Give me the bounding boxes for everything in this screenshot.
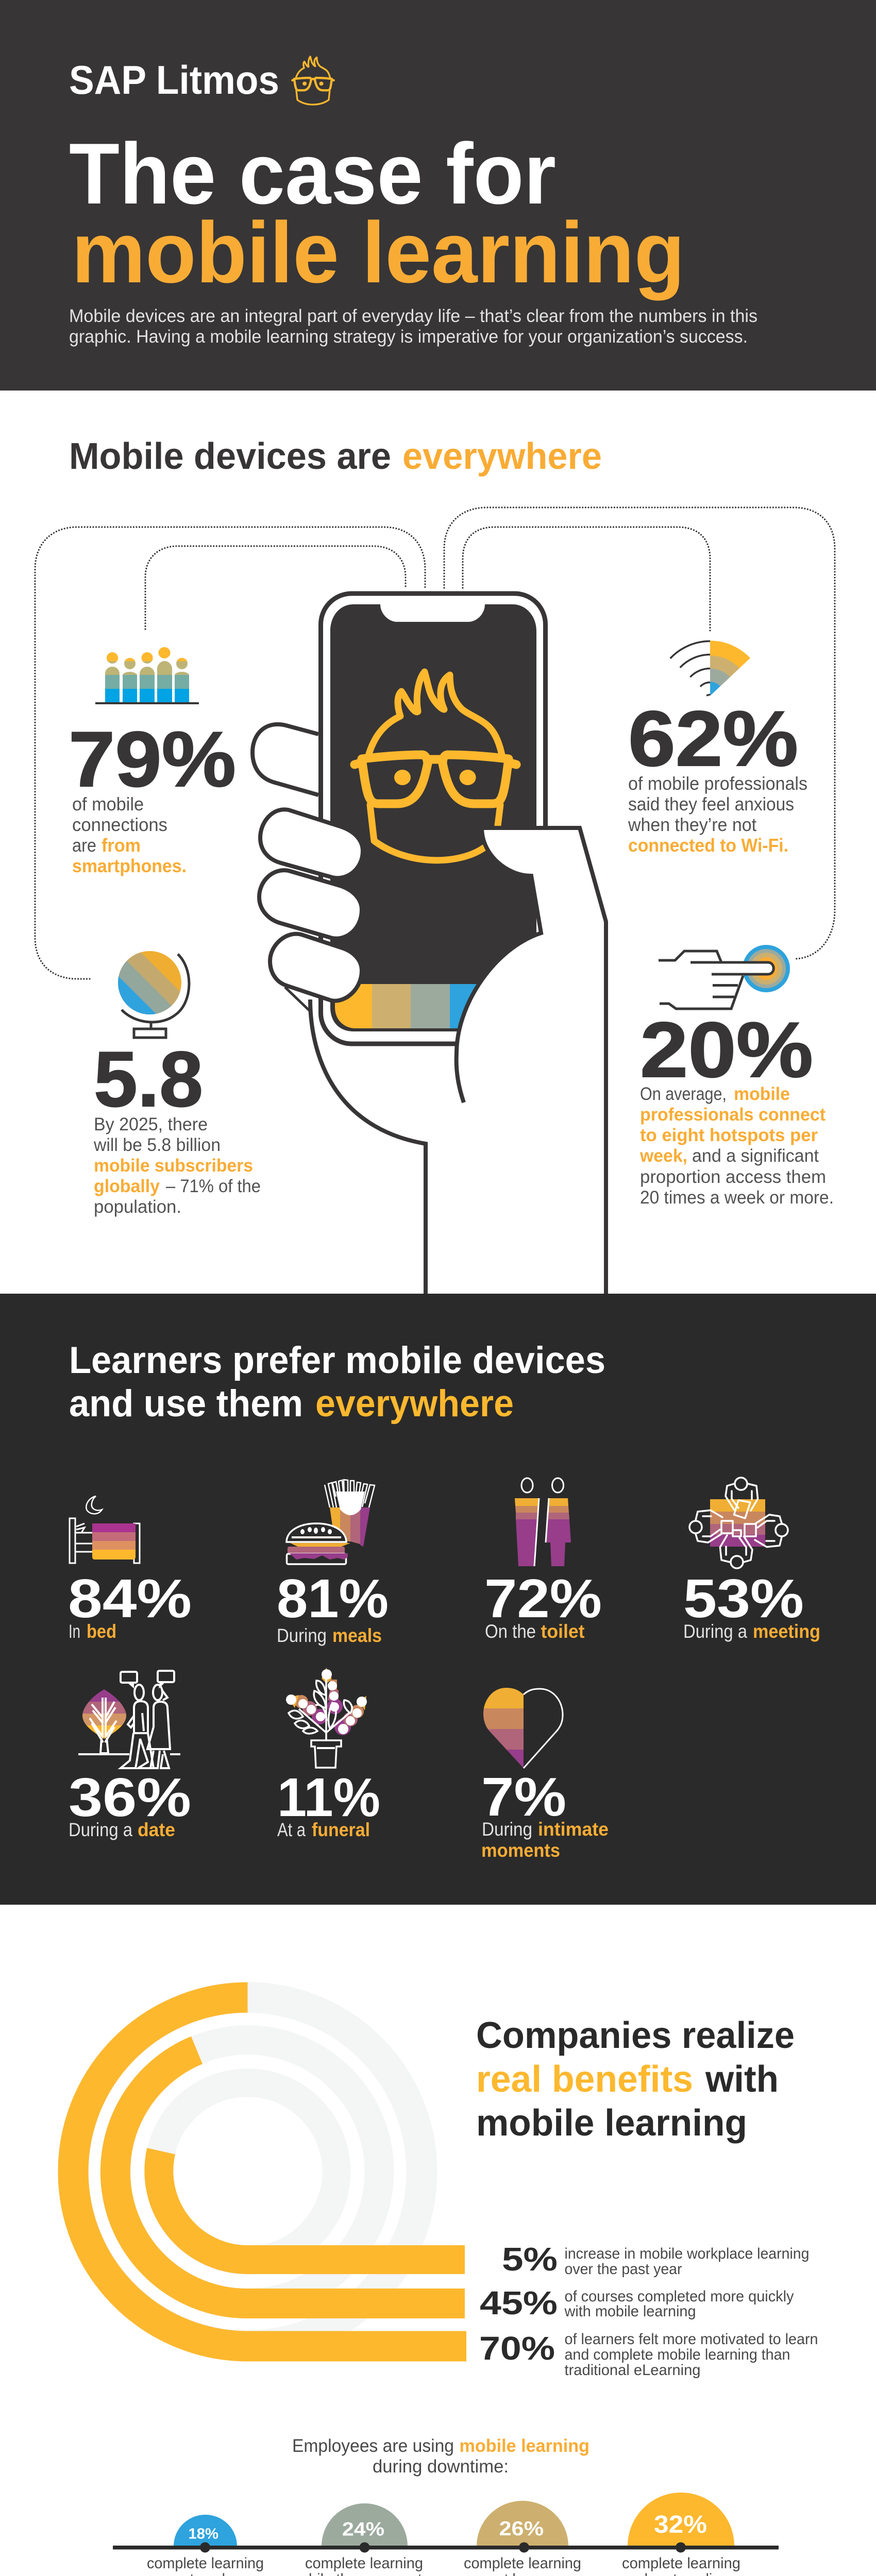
stat: during intimate moments	[479, 1685, 609, 1861]
label: On the	[485, 1621, 536, 1642]
number: 36%	[69, 1767, 191, 1828]
stat: 70%: and complete mobile learning than	[565, 2346, 790, 2363]
icon: couple walking by tree	[78, 1671, 180, 1768]
heading: companies realize real benefits	[476, 2015, 795, 2144]
description: to eight hotspots per	[640, 1125, 818, 1145]
stat: 5%: over the past year	[565, 2261, 682, 2278]
icon: mascot face on screen	[355, 672, 516, 860]
label: moments	[481, 1840, 560, 1861]
description: smartphones.	[72, 855, 187, 876]
panel: learners prefer mobile devices	[0, 1294, 876, 1905]
number: 7%	[481, 1767, 566, 1827]
phone screen	[330, 604, 536, 1031]
label: funeral	[312, 1819, 370, 1840]
description	[72, 793, 187, 876]
dome: 26% home: 26%	[499, 2518, 544, 2540]
stat: 70%	[479, 2330, 818, 2379]
label: when traveling: complete learning	[622, 2555, 740, 2572]
number: 72%	[484, 1568, 602, 1629]
description: of mobile	[72, 793, 144, 815]
number: 79%	[69, 716, 236, 803]
description: week,	[639, 1146, 687, 1166]
label: During	[482, 1819, 532, 1840]
intro text: graphic. Having a mobile learning strategy is imperative for your organization’s success.	[69, 327, 748, 347]
stat: 5%: 5%	[502, 2241, 558, 2278]
logo: SAP Litmos wordmark: SAP Litmos	[69, 57, 279, 103]
icon: wi-fi fan	[670, 641, 750, 696]
description: 20 times a week or more.	[640, 1188, 834, 1208]
label: During	[277, 1625, 327, 1646]
description: On average,	[640, 1084, 727, 1104]
heading: companies realize real benefits: with	[705, 2059, 779, 2100]
number: 20%	[640, 1006, 813, 1094]
description: said they feel anxious	[628, 793, 794, 815]
stat: 5%: increase in mobile workplace learning	[565, 2245, 809, 2262]
title: The case for	[69, 125, 556, 222]
icon: people	[95, 647, 199, 704]
label	[481, 1819, 609, 1861]
heading: companies realize real benefits: mobile learning	[476, 2103, 747, 2144]
dome: 24% commute	[322, 2503, 408, 2546]
number: 53%	[683, 1568, 804, 1629]
stat: during meals	[277, 1480, 389, 1646]
stat: 20% hotspots	[639, 945, 834, 1208]
dome: 18% at work	[174, 2515, 237, 2546]
heading: mobile devices are everywhere	[69, 436, 602, 477]
stat: 5%	[502, 2241, 809, 2278]
illustration: hand holding phone	[252, 594, 606, 1294]
stat: 70%: of learners felt more motivated to learn	[565, 2331, 818, 2348]
description: mobile	[734, 1084, 790, 1104]
label	[485, 1621, 584, 1642]
subheading: downtime: during downtime:	[373, 2456, 509, 2477]
subheading: downtime: mobile learning	[460, 2436, 589, 2456]
label	[277, 1625, 382, 1646]
description	[628, 773, 807, 856]
description: proportion access them	[640, 1167, 826, 1187]
dome: 26% home	[477, 2501, 568, 2546]
description: are	[72, 835, 96, 856]
chart: downtime timeline	[113, 2493, 779, 2576]
heading: everywhere	[315, 1383, 514, 1425]
label: During a	[69, 1819, 132, 1840]
number: 62%	[628, 695, 798, 783]
icon: finger touching target	[659, 945, 790, 1009]
panel: header	[0, 0, 876, 391]
three gripping fingers	[259, 809, 363, 1001]
heading: mobile devices are everywhere: everywhere	[402, 436, 602, 477]
description	[93, 1114, 261, 1217]
label: date	[138, 1819, 175, 1840]
finger behind phone	[252, 724, 318, 795]
label: bed	[87, 1621, 116, 1642]
label: at work: complete learning	[147, 2555, 264, 2572]
dome: 18% at work: 18%	[189, 2526, 218, 2542]
title: mobile learning	[72, 204, 685, 301]
label	[683, 1621, 820, 1642]
intro text	[69, 306, 757, 347]
label: During a	[683, 1621, 747, 1642]
icon: globe	[118, 951, 191, 1039]
subheading: downtime: Employees are using	[292, 2436, 454, 2456]
dome: 32% traveling	[628, 2493, 734, 2546]
stat: 5.8 billion subscribers	[93, 925, 261, 1217]
stat: 70%: 70%	[479, 2330, 555, 2367]
icon: restroom figures	[515, 1478, 571, 1566]
label: meals	[332, 1625, 382, 1646]
screen colour bands	[335, 984, 496, 1028]
connector: dotted lines	[35, 507, 835, 979]
label: In	[69, 1621, 80, 1642]
stat: on the toilet	[484, 1478, 602, 1642]
icon: burger and fries	[287, 1480, 375, 1564]
description: connections	[72, 814, 167, 835]
label	[277, 1819, 370, 1840]
stat: 45%: with mobile learning	[564, 2303, 696, 2320]
description: globally	[94, 1176, 160, 1196]
stat: 70%: traditional eLearning	[565, 2362, 701, 2379]
label: intimate	[538, 1819, 609, 1840]
heading	[69, 1340, 605, 1425]
icon: half-filled heart	[479, 1685, 563, 1770]
phone body	[321, 594, 545, 1044]
stat: 62% wi-fi	[628, 641, 807, 856]
label: at home: complete learning	[464, 2555, 581, 2572]
label: toilet	[541, 1621, 584, 1642]
number: 5.8	[94, 1036, 203, 1123]
description: mobile subscribers	[94, 1156, 253, 1176]
heading: companies realize real benefits: Companies realize	[476, 2015, 795, 2056]
intro text: Mobile devices are an integral part of everyday life – that’s clear from the numbers in this	[69, 306, 757, 326]
description: will be 5.8 billion	[93, 1135, 221, 1155]
description: from	[102, 835, 141, 856]
icon: meeting from above	[689, 1478, 788, 1568]
description: and a significant	[692, 1146, 819, 1166]
heading: companies realize real benefits: real benefits	[476, 2059, 693, 2100]
heading: mobile devices are everywhere: Mobile devices are	[69, 436, 391, 477]
label: meeting	[753, 1621, 820, 1642]
stat: 45%	[480, 2284, 794, 2321]
number: 84%	[68, 1568, 192, 1629]
stat: 79% smartphones	[69, 647, 236, 876]
label: At a	[277, 1819, 306, 1840]
description	[639, 1084, 834, 1208]
description: when they’re not	[628, 814, 756, 835]
stat: at a funeral	[277, 1668, 380, 1840]
label: while they commute: complete learning	[305, 2555, 423, 2572]
label	[69, 1819, 175, 1840]
stat: in bed	[68, 1496, 192, 1642]
title	[69, 125, 685, 301]
heading: and use them	[69, 1383, 303, 1425]
label	[69, 1621, 116, 1642]
dome: 24% commute: 24%	[342, 2518, 384, 2540]
subheading: downtime	[292, 2436, 589, 2477]
stat: during a date	[69, 1671, 191, 1840]
number: 11%	[277, 1767, 380, 1828]
description: professionals connect	[640, 1105, 826, 1125]
description: of mobile professionals	[628, 773, 807, 794]
icon: Litmos mascot head	[292, 57, 334, 105]
description: – 71% of the	[166, 1176, 261, 1196]
icon: potted flowers	[286, 1668, 367, 1768]
description: population.	[94, 1197, 181, 1217]
dome: 32% traveling: 32%	[654, 2511, 707, 2538]
stat: during a meeting	[683, 1478, 820, 1642]
number: 81%	[277, 1568, 389, 1629]
stat: 45%: 45%	[480, 2284, 558, 2321]
axis line	[113, 2542, 779, 2552]
heading: Learners prefer mobile devices	[69, 1340, 605, 1381]
icon: bed	[70, 1496, 140, 1563]
chart: concentric ring benefits	[73, 1997, 466, 2346]
stat: 45%: of courses completed more quickly	[565, 2288, 794, 2305]
description: connected to Wi-Fi.	[628, 835, 788, 856]
thumb and palm	[285, 828, 606, 1294]
description: By 2025, there	[94, 1114, 208, 1134]
